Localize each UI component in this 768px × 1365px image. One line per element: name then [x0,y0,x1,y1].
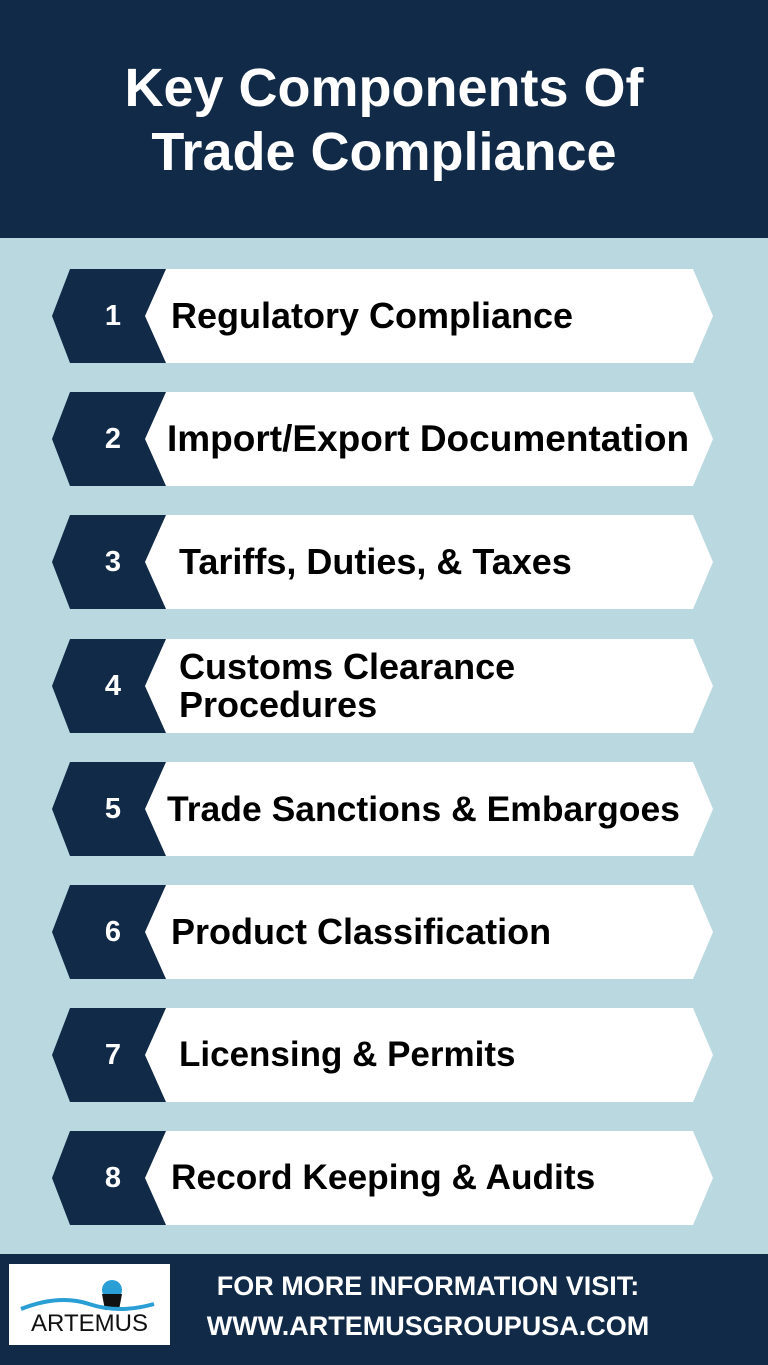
item 5 [52,762,713,856]
item 2 [52,392,713,486]
header [0,0,768,238]
item 5: Trade Sanctions & Embargoes [167,789,680,829]
item 7: Licensing & Permits [179,1035,515,1074]
item 6: Product Classification [171,911,551,952]
item 4: Procedures [179,684,377,725]
footer text: WWW.ARTEMUSGROUPUSA.COM [207,1311,649,1341]
item 4 [52,639,713,733]
item 1: Regulatory Compliance [171,295,573,336]
item 5: 5 [105,793,121,825]
title: Trade Compliance [151,122,617,182]
item 6 [52,885,713,979]
item 6: 6 [105,916,121,948]
footer text [206,1271,649,1341]
item 7 [52,1008,713,1102]
footer text: FOR MORE INFORMATION VISIT: [217,1271,639,1301]
item 1 [52,269,713,363]
item 4: Customs Clearance [179,646,515,687]
item 1: 1 [105,300,121,332]
item 2: 2 [105,423,121,455]
item 7: 7 [105,1039,121,1071]
footer [0,1254,768,1365]
item 3 [52,515,713,609]
logo [9,1264,170,1345]
item 3: Tariffs, Duties, & Taxes [179,541,572,582]
logo: ARTEMUS [31,1310,148,1337]
item 8: 8 [105,1162,121,1194]
item 4: 4 [105,670,121,702]
title: Key Components Of [124,58,644,118]
title [124,58,644,182]
item 8: Record Keeping & Audits [171,1158,595,1197]
item 2: Import/Export Documentation [167,418,689,459]
item 3: 3 [105,546,121,578]
item 8 [52,1131,713,1225]
